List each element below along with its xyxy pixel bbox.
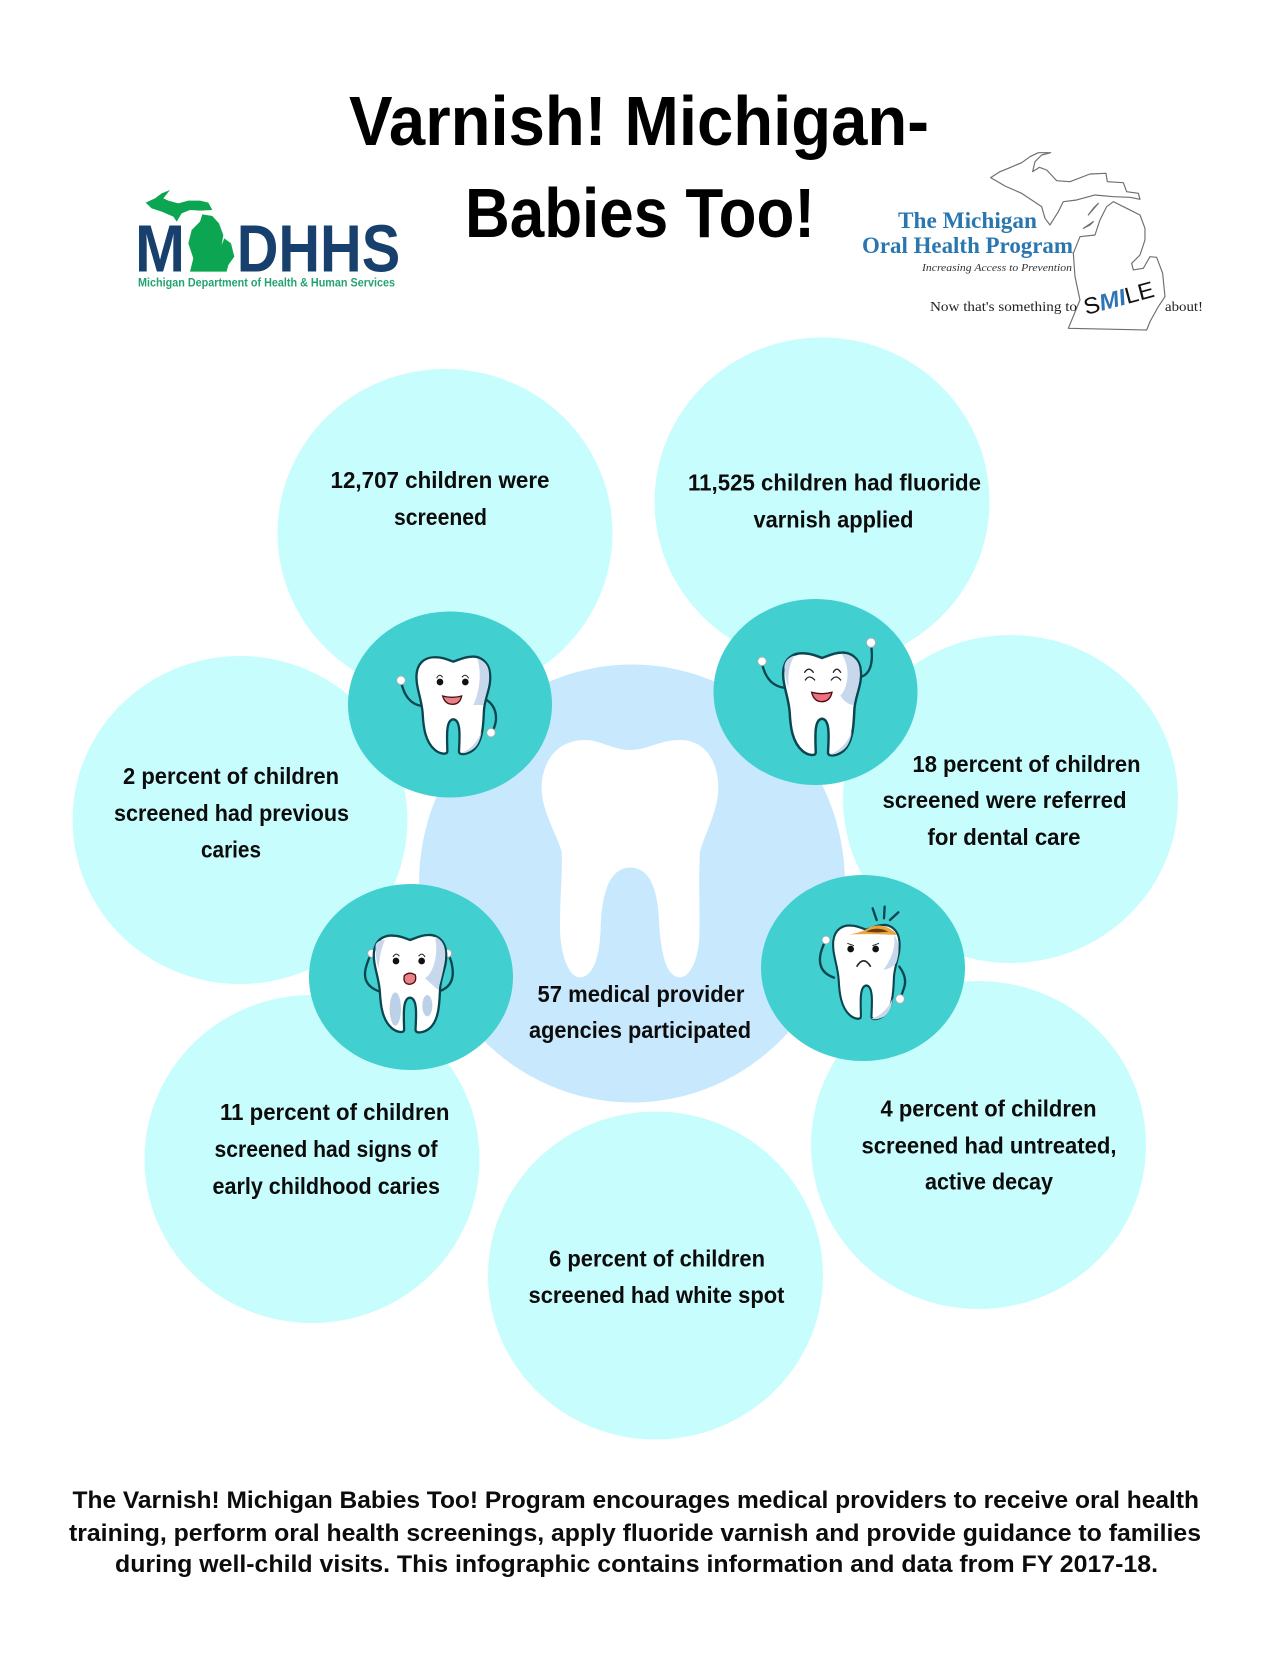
- text: white spot: [528, 1246, 785, 1308]
- text: early childhood caries: 11 percent of children: [220, 1099, 450, 1125]
- text: children screened: screened: [394, 504, 487, 530]
- icon: cheering tooth: [758, 638, 876, 755]
- text: early childhood caries: [212, 1099, 450, 1199]
- text: children screened: 12,707 children were: [330, 467, 550, 493]
- text: medical provider agencies: [529, 981, 751, 1043]
- text: fluoride varnish applied: 11,525 children had fluoride: [688, 470, 981, 496]
- text: previous caries: 2 percent of children: [123, 763, 339, 789]
- text: white spot: screened had white spot: [528, 1282, 785, 1308]
- Michigan state outline: [991, 153, 1165, 330]
- text: untreated active decay: 4 percent of children: [880, 1096, 1096, 1122]
- text: program description footer: training, perform oral health screenings, apply fluoride varnish and provide guidance to families: [69, 1520, 1201, 1547]
- logo: MDHHS: Michigan Department of Health & Human Services: [138, 278, 395, 290]
- text: fluoride varnish applied: [688, 470, 981, 532]
- logo: Michigan Oral Health Program: [862, 153, 1203, 330]
- text: white spot: 6 percent of children: [549, 1246, 765, 1272]
- text: program description footer: during well-child visits. This infographic contains information and data from FY 2017-18.: [115, 1551, 1158, 1578]
- icon: central white tooth: [542, 740, 718, 977]
- text: referred for dental care: screened were referred: [882, 787, 1126, 813]
- logo: Michigan Oral Health Program: The Michigan: [898, 208, 1037, 233]
- text: early childhood caries: screened had signs of: [214, 1136, 438, 1162]
- icon: worried tooth with white spots: [365, 935, 453, 1032]
- text: medical provider agencies: agencies participated: [529, 1017, 751, 1043]
- text: untreated active decay: screened had untreated,: [862, 1132, 1116, 1158]
- text: fluoride varnish applied: varnish applied: [754, 506, 914, 532]
- text: previous caries: caries: [201, 836, 261, 862]
- text: medical provider agencies: 57 medical provider: [538, 981, 745, 1007]
- logo: Michigan Oral Health Program: about!: [1165, 300, 1203, 315]
- icon: waving tooth: [397, 657, 496, 754]
- logo: Michigan Oral Health Program: Now that's something to: [930, 300, 1077, 315]
- title: [349, 82, 929, 252]
- panel: light cyan stat circles: [72, 338, 1178, 1440]
- text: untreated active decay: [862, 1096, 1116, 1194]
- title: Varnish! Michigan-: [349, 82, 929, 160]
- logo: MDHHS: [135, 190, 400, 290]
- text: previous caries: [114, 763, 349, 862]
- text: referred for dental care: 18 percent of children: [912, 751, 1140, 777]
- icon: tooth with decay: [820, 907, 905, 1019]
- title: Babies Too!: [465, 174, 815, 252]
- logo: MDHHS: DHHS: [237, 212, 400, 287]
- logo: Michigan Oral Health Program: Oral Health Program: [862, 233, 1073, 258]
- panel: teal circles: [309, 599, 965, 1070]
- text: previous caries: screened had previous: [114, 800, 349, 826]
- logo: Michigan Oral Health Program: Increasing Access to Prevention: [921, 263, 1072, 274]
- text: program description footer: [69, 1487, 1201, 1578]
- panel: central circle: [419, 664, 845, 1102]
- text: referred for dental care: for dental care: [928, 824, 1080, 850]
- text: referred for dental care: [882, 751, 1140, 850]
- logo: Michigan Oral Health Program: SMILE: [1081, 276, 1157, 320]
- text: early childhood caries: early childhood caries: [212, 1173, 440, 1199]
- text: children screened: [330, 467, 550, 530]
- text: program description footer: The Varnish! Michigan Babies Too! Program encourages medical providers to receive oral health: [72, 1487, 1199, 1514]
- logo: MDHHS: M: [135, 212, 185, 287]
- text: untreated active decay: active decay: [925, 1168, 1053, 1194]
